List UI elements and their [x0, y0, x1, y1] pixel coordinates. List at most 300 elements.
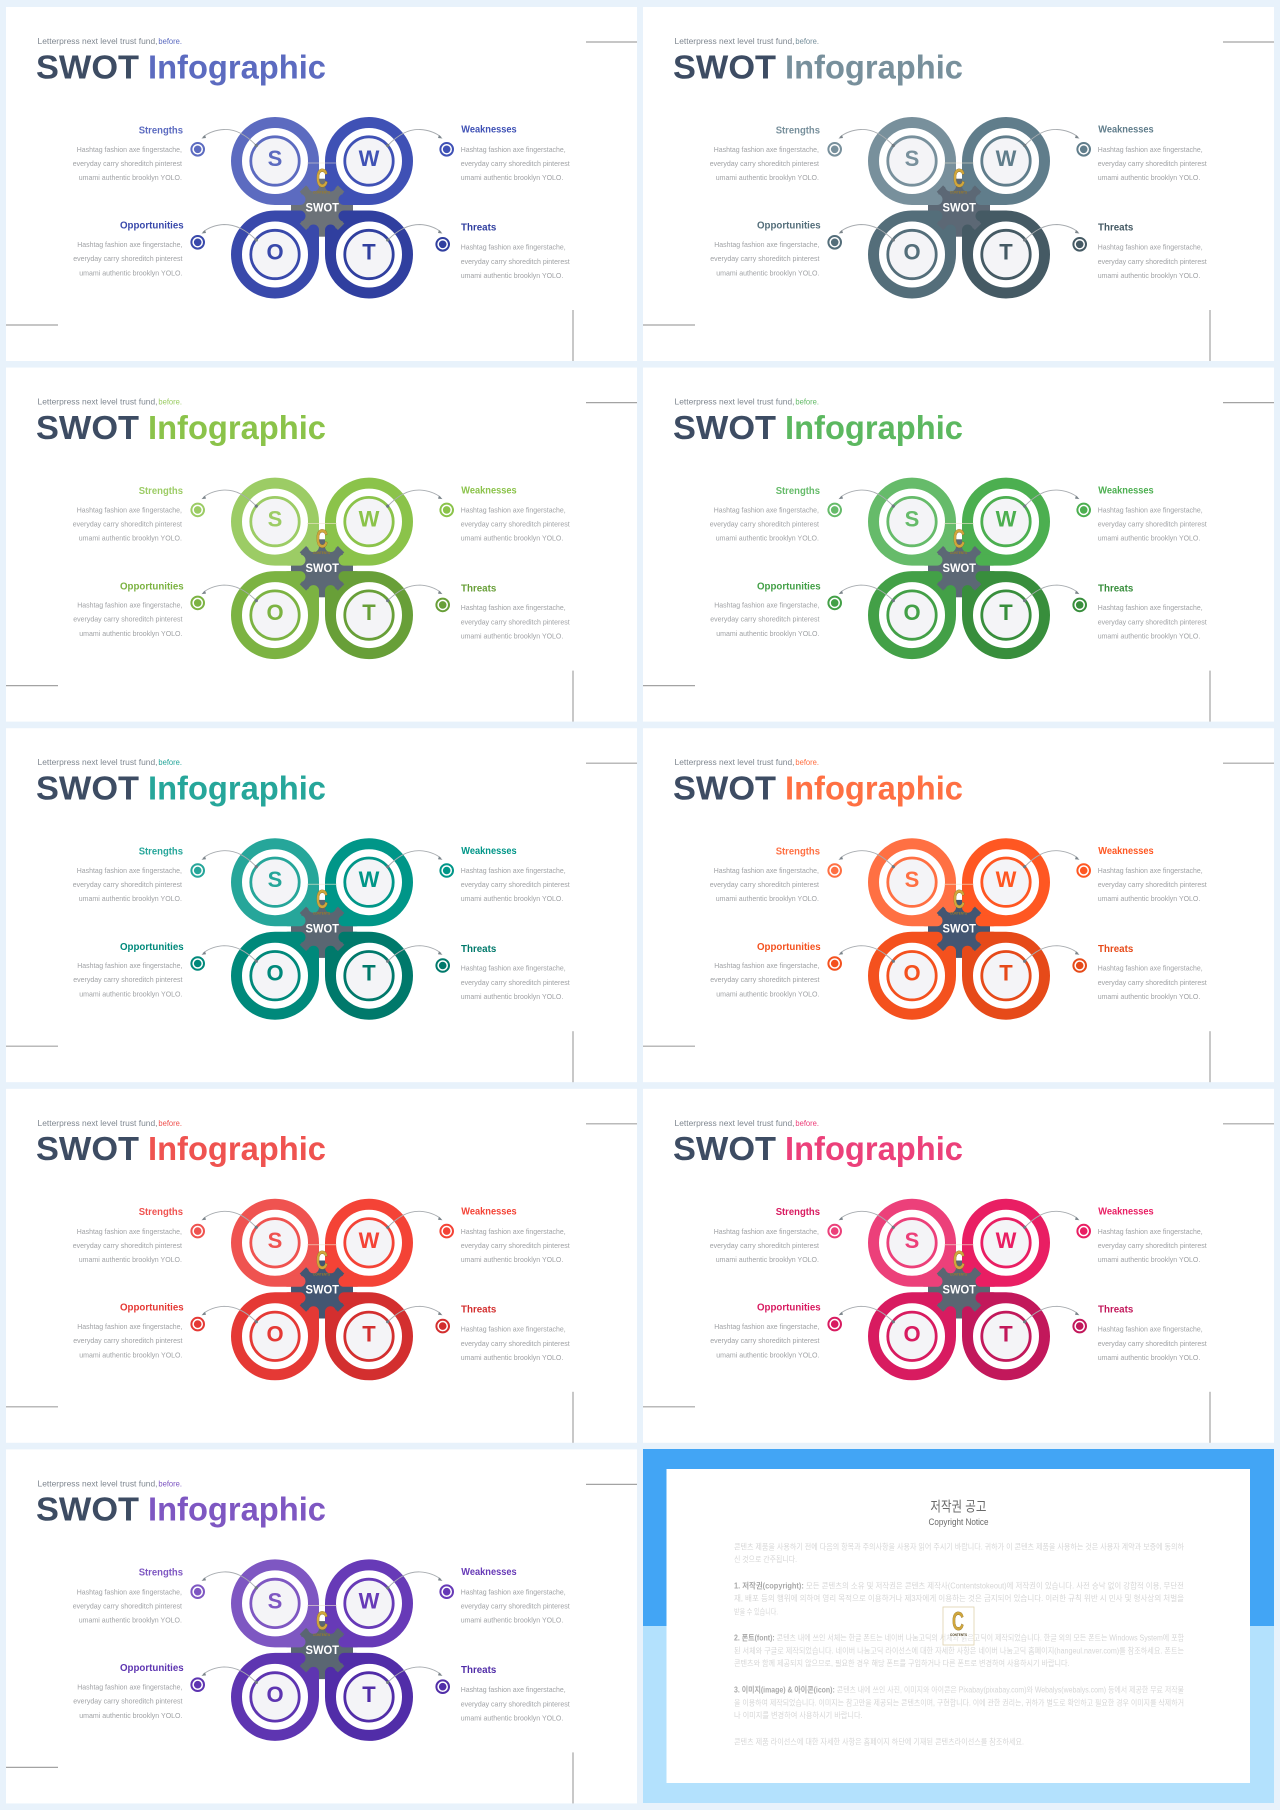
- quadrant: T: [968, 937, 1044, 1014]
- text block: strengths: Hashtag fashion axe fingerstache,: [714, 1227, 819, 1236]
- text block: strengths: umami authentic brooklyn YOLO.: [79, 1255, 182, 1264]
- text block: opportunities: umami authentic brooklyn YOLO.: [79, 990, 182, 999]
- text block: strengths: everyday carry shoreditch pinterest: [73, 1241, 182, 1250]
- text block: threats: Hashtag fashion axe fingerstache,: [1098, 964, 1203, 973]
- text block: threats: everyday carry shoreditch pinterest: [1098, 257, 1207, 266]
- quadrant: S: [237, 122, 314, 200]
- panel: purple SWOT slide: [6, 1449, 637, 1803]
- subtitle: Letterpress next level trust fund,: [674, 1118, 794, 1128]
- text block: weaknesses: [1098, 1206, 1207, 1264]
- watermark: C: [953, 1245, 965, 1275]
- text block: strengths: everyday carry shoreditch pinterest: [73, 159, 182, 168]
- text block: opportunities: Opportunities: [120, 942, 184, 953]
- text block: weaknesses: umami authentic brooklyn YOLO.: [1098, 1255, 1200, 1264]
- arrows: [838, 129, 1080, 242]
- text block: threats: everyday carry shoreditch pinterest: [461, 1339, 570, 1348]
- text block: threats: [1098, 583, 1207, 641]
- text block: opportunities: [73, 1663, 184, 1720]
- notice body text: [734, 1542, 1185, 1746]
- watermark: CONTENTS: [950, 550, 967, 555]
- text block: threats: Threats: [1098, 944, 1134, 955]
- text block: opportunities: [73, 581, 184, 638]
- text block: weaknesses: [1098, 846, 1207, 903]
- text block: strengths: Strengths: [776, 125, 820, 136]
- quadrant: S: S: [268, 1588, 282, 1613]
- text block: weaknesses: Hashtag fashion axe fingerstache,: [461, 866, 566, 875]
- quadrant: W: [330, 844, 408, 921]
- text block: strengths: Hashtag fashion axe fingerstache,: [77, 1227, 182, 1236]
- watermark: C: [316, 163, 328, 193]
- text block: threats: Threats: [461, 223, 497, 234]
- gear label: SWOT: [306, 1284, 339, 1296]
- quadrant: T: T: [362, 961, 376, 986]
- title: [36, 48, 326, 85]
- quadrant: T: T: [999, 961, 1013, 986]
- gear label: SWOT: [306, 1645, 339, 1657]
- text block: weaknesses: Hashtag fashion axe fingerstache,: [1098, 1227, 1203, 1236]
- panel: light green SWOT slide: [6, 368, 637, 722]
- quadrant: T: T: [362, 1682, 376, 1707]
- gear label: SWOT: [942, 924, 976, 936]
- text block: weaknesses: umami authentic brooklyn YOLO.: [461, 894, 563, 903]
- notice body text: 콘텐츠 제품 라이선스에 대한 자세한 사항은 홈페이지 하단에 기재된 콘텐츠라이선스를 참조하세요.: [734, 1736, 1024, 1746]
- text block: weaknesses: everyday carry shoreditch pinterest: [461, 1241, 570, 1250]
- panel: green SWOT slide: [643, 368, 1274, 722]
- text block: opportunities: Opportunities: [120, 1663, 184, 1674]
- quadrant: O: [237, 216, 314, 293]
- watermark: C: [953, 884, 965, 914]
- notice body text: 1. 저작권(copyright): 모든 콘텐츠의 소유 및 저작권은 콘텐츠 제작사(Contentstokeout)에 저작권이 있습니다. 사전 승낙 없이 강합적 이용, 무단전: [734, 1580, 1184, 1590]
- watermark: C: [316, 524, 328, 554]
- panel: orange SWOT slide: [643, 728, 1274, 1082]
- text block: threats: umami authentic brooklyn YOLO.: [461, 632, 563, 641]
- text block: opportunities: [710, 942, 821, 999]
- text block: strengths: everyday carry shoreditch pinterest: [710, 520, 819, 529]
- subtitle: before.: [158, 397, 182, 407]
- notice body text: 콘텐츠 제품을 사용하기 전에 다음의 항목과 주의사항을 사용자 읽어 주시기 바랍니다. 귀하가 이 콘텐츠 제품을 사용하는 것은 사용자 계약과 보증에 동의하: [734, 1542, 1185, 1552]
- text block: weaknesses: Hashtag fashion axe fingerstache,: [461, 1227, 566, 1236]
- quadrant: W: W: [996, 146, 1017, 171]
- text block: opportunities: everyday carry shoreditch pinterest: [710, 975, 820, 984]
- text block: threats: everyday carry shoreditch pinterest: [1098, 978, 1207, 987]
- subtitle: before.: [795, 1118, 819, 1128]
- subtitle: Letterpress next level trust fund,: [38, 36, 158, 46]
- target icons: [191, 864, 453, 972]
- watermark: CONTENTS: [313, 550, 330, 555]
- notice body text: 된 서체와 구글로 제작되었습니다. 네이버 나눔고딕 라이선스에 대한 자세한 사항은 네이버 나눔고딕 홈페이지(hangeul.naver.com)를 참조하세요. 폰트는: [734, 1646, 1184, 1656]
- text block: strengths: Strengths: [139, 847, 183, 858]
- text block: strengths: Strengths: [776, 486, 820, 497]
- text block: strengths: umami authentic brooklyn YOLO.: [716, 173, 819, 182]
- title: [673, 48, 963, 85]
- title: Infographic: [785, 1130, 963, 1167]
- notice body text: 콘텐츠와 함께 제공되지 않으므로, 필요한 경우 해당 폰트를 구입하거나 다른 폰트로 변경하여 사용하시기 바랍니다.: [734, 1658, 1070, 1668]
- watermark: C: [316, 884, 328, 914]
- text block: strengths: [73, 1207, 183, 1264]
- text block: strengths: umami authentic brooklyn YOLO.: [716, 534, 819, 543]
- watermark: CONTENTS: [313, 1271, 330, 1276]
- text block: opportunities: umami authentic brooklyn YOLO.: [716, 268, 820, 278]
- quadrant: T: T: [362, 600, 376, 625]
- text block: threats: Hashtag fashion axe fingerstache,: [461, 242, 566, 252]
- text block: opportunities: Hashtag fashion axe fingerstache,: [714, 961, 820, 970]
- text block: opportunities: Hashtag fashion axe fingerstache,: [714, 601, 820, 610]
- text block: strengths: Hashtag fashion axe fingerstache,: [77, 1587, 182, 1596]
- arrows: [202, 851, 442, 963]
- quadrant: T: T: [999, 240, 1013, 264]
- text block: opportunities: Opportunities: [757, 581, 821, 592]
- text block: weaknesses: [461, 1567, 570, 1624]
- title: Infographic: [148, 409, 326, 446]
- text block: opportunities: [710, 221, 821, 278]
- quadrant: S: S: [268, 867, 282, 892]
- text block: threats: Threats: [1098, 583, 1134, 594]
- title: Infographic: [148, 1491, 326, 1528]
- target icons: [191, 1585, 453, 1693]
- quadrant: T: [968, 577, 1044, 654]
- notice body text: 3. 이미지(image) & 아이콘(icon): 콘텐츠 내에 쓰인 사진, 이미지와 아이콘은 Pixabay(pixabay.com)와 Webalys(webalys.com) 등에서 제공한 무료 저작물: [734, 1684, 1184, 1694]
- watermark: [944, 884, 974, 916]
- title: SWOT: [36, 48, 139, 85]
- text block: weaknesses: umami authentic brooklyn YOLO.: [1098, 173, 1200, 182]
- quadrant: S: S: [268, 507, 282, 532]
- text block: opportunities: umami authentic brooklyn YOLO.: [79, 629, 182, 638]
- quadrant: S: S: [268, 1228, 282, 1253]
- text block: strengths: [710, 486, 820, 543]
- text block: opportunities: umami authentic brooklyn YOLO.: [79, 1711, 182, 1720]
- text block: weaknesses: everyday carry shoreditch pinterest: [1098, 880, 1207, 889]
- text block: opportunities: everyday carry shoreditch pinterest: [710, 1336, 820, 1345]
- text block: weaknesses: Weaknesses: [461, 1207, 517, 1218]
- arrows: [202, 129, 442, 242]
- text block: strengths: umami authentic brooklyn YOLO.: [79, 1615, 182, 1624]
- subtitle: Letterpress next level trust fund,: [38, 397, 158, 407]
- title: SWOT: [673, 48, 776, 85]
- text block: strengths: [73, 125, 183, 182]
- text block: strengths: umami authentic brooklyn YOLO.: [716, 894, 819, 903]
- text block: threats: Hashtag fashion axe fingerstache,: [1098, 242, 1203, 252]
- gear label: SWOT: [306, 924, 339, 936]
- text block: strengths: Strengths: [139, 125, 183, 136]
- target icons: [191, 143, 453, 251]
- panel: teal SWOT slide: [6, 728, 637, 1082]
- quadrant: O: O: [903, 1321, 921, 1346]
- notice body text: 재, 배포 등의 행위에 의하여 영리 목적으로 이용하거나 제3자에게 이용하는 것은 금지되어 있습니다. 이러한 규칙 위반 시 민사 및 형사상의 처벌을: [734, 1593, 1184, 1603]
- gear label: SWOT: [306, 563, 339, 575]
- text block: opportunities: umami authentic brooklyn YOLO.: [79, 1350, 182, 1359]
- text block: opportunities: everyday carry shoreditch pinterest: [710, 254, 820, 263]
- watermark: [307, 163, 337, 194]
- text block: threats: [461, 1665, 570, 1722]
- text block: threats: umami authentic brooklyn YOLO.: [461, 271, 563, 280]
- title: SWOT: [673, 409, 776, 446]
- watermark: [307, 1605, 337, 1637]
- text block: strengths: Hashtag fashion axe fingerstache,: [714, 866, 819, 875]
- text block: threats: everyday carry shoreditch pinterest: [461, 618, 570, 627]
- text block: threats: everyday carry shoreditch pinterest: [461, 1699, 570, 1708]
- quadrant: W: [968, 483, 1044, 560]
- subtitle: Letterpress next level trust fund,: [38, 757, 158, 767]
- text block: opportunities: Opportunities: [120, 1303, 184, 1314]
- text block: threats: umami authentic brooklyn YOLO.: [1098, 271, 1200, 280]
- gear label: SWOT: [942, 1284, 976, 1296]
- gear: [291, 1621, 353, 1679]
- quadrant: O: [874, 1298, 950, 1375]
- panel: copyright notice: [643, 1449, 1274, 1803]
- watermark: CONTENTS: [950, 911, 967, 916]
- text block: strengths: [710, 125, 820, 182]
- quadrant: O: [874, 937, 950, 1014]
- text block: strengths: everyday carry shoreditch pinterest: [710, 159, 819, 168]
- text block: weaknesses: [1098, 485, 1207, 543]
- text block: threats: umami authentic brooklyn YOLO.: [1098, 632, 1200, 641]
- text block: opportunities: everyday carry shoreditch pinterest: [710, 615, 820, 624]
- text block: opportunities: everyday carry shoreditch pinterest: [73, 1336, 182, 1345]
- text block: opportunities: umami authentic brooklyn YOLO.: [716, 1350, 820, 1359]
- title: Infographic: [785, 409, 963, 446]
- watermark: CONTENTS: [950, 190, 967, 194]
- text block: threats: umami authentic brooklyn YOLO.: [461, 1353, 563, 1362]
- title: [36, 409, 326, 446]
- watermark: CONTENTS: [950, 1632, 967, 1637]
- text block: strengths: umami authentic brooklyn YOLO.: [716, 1255, 819, 1264]
- quadrant: T: T: [999, 600, 1013, 625]
- title: SWOT: [673, 770, 776, 807]
- text block: opportunities: Opportunities: [757, 1303, 821, 1314]
- title: [36, 1130, 326, 1167]
- title: SWOT: [673, 1130, 776, 1167]
- quadrant: W: W: [359, 146, 380, 171]
- quadrant: W: [968, 1204, 1044, 1281]
- subtitle: Letterpress next level trust fund,: [38, 1478, 158, 1488]
- text block: weaknesses: Weaknesses: [1098, 1207, 1154, 1218]
- subtitle: before.: [158, 1118, 182, 1128]
- text block: threats: Hashtag fashion axe fingerstache,: [1098, 1324, 1203, 1333]
- text block: threats: [1098, 1304, 1207, 1362]
- quadrant: S: [874, 122, 950, 200]
- text block: weaknesses: Hashtag fashion axe fingerstache,: [461, 1587, 566, 1596]
- text block: weaknesses: Weaknesses: [1098, 846, 1154, 857]
- text block: opportunities: Hashtag fashion axe fingerstache,: [77, 961, 182, 970]
- quadrant: W: W: [359, 867, 380, 892]
- title: Infographic: [148, 770, 326, 807]
- watermark: C: [316, 1245, 328, 1275]
- text block: threats: Threats: [461, 1665, 497, 1676]
- text block: threats: everyday carry shoreditch pinterest: [1098, 1339, 1207, 1348]
- watermark: CONTENTS: [950, 1271, 967, 1276]
- band fingers over gear: [288, 1256, 356, 1324]
- text block: threats: Hashtag fashion axe fingerstache,: [461, 1685, 566, 1694]
- quadrant: O: O: [903, 240, 921, 264]
- band fingers over gear: [288, 535, 356, 603]
- text block: weaknesses: everyday carry shoreditch pinterest: [461, 880, 570, 889]
- text block: strengths: Strengths: [139, 1568, 183, 1579]
- quadrant: O: O: [903, 961, 921, 986]
- gear: [928, 539, 990, 597]
- text block: weaknesses: Weaknesses: [461, 485, 517, 496]
- text block: threats: everyday carry shoreditch pinterest: [1098, 618, 1207, 627]
- text block: opportunities: everyday carry shoreditch pinterest: [73, 1696, 182, 1705]
- subtitle: Letterpress next level trust fund,: [674, 397, 794, 407]
- text block: strengths: everyday carry shoreditch pinterest: [73, 880, 182, 889]
- text block: opportunities: Hashtag fashion axe fingerstache,: [77, 1322, 182, 1331]
- title: Infographic: [785, 770, 963, 807]
- band fingers over gear: [288, 1616, 356, 1684]
- quadrant: S: [237, 483, 314, 560]
- title: [673, 1130, 963, 1167]
- text block: opportunities: Opportunities: [120, 221, 184, 232]
- target icons: [191, 504, 453, 611]
- quadrant: T: [330, 216, 408, 293]
- text block: weaknesses: everyday carry shoreditch pinterest: [461, 159, 570, 168]
- quadrant: O: [237, 1298, 314, 1375]
- watermark: [944, 163, 974, 194]
- text block: weaknesses: [461, 125, 570, 182]
- text block: opportunities: [73, 1302, 184, 1359]
- gear: [928, 179, 990, 237]
- watermark: CONTENTS: [313, 1632, 330, 1637]
- text block: strengths: everyday carry shoreditch pinterest: [73, 1601, 182, 1610]
- text block: strengths: umami authentic brooklyn YOLO.: [79, 534, 182, 543]
- text block: weaknesses: umami authentic brooklyn YOLO.: [461, 534, 563, 543]
- text block: strengths: [73, 486, 183, 543]
- quadrant: O: O: [266, 961, 284, 986]
- text block: threats: everyday carry shoreditch pinterest: [461, 978, 570, 987]
- text block: opportunities: Opportunities: [120, 581, 184, 592]
- quadrant: T: [968, 1298, 1044, 1375]
- band fingers over gear: [288, 895, 356, 963]
- arrows: [838, 851, 1080, 963]
- target icons: [828, 864, 1090, 972]
- quadrant: O: O: [266, 600, 284, 625]
- text block: opportunities: [73, 221, 184, 278]
- title: SWOT: [36, 1130, 139, 1167]
- text block: opportunities: Hashtag fashion axe fingerstache,: [77, 240, 182, 249]
- quadrant: W: W: [359, 1228, 380, 1253]
- subtitle: before.: [795, 36, 819, 46]
- target icons: [828, 1225, 1090, 1332]
- quadrant: O: [237, 1658, 314, 1735]
- quadrant: W: [330, 1204, 408, 1281]
- notice title: 저작권 공고: [930, 1498, 986, 1514]
- watermark: C: [316, 1605, 328, 1635]
- target icons: [828, 143, 1090, 251]
- quadrant: O: [874, 577, 950, 654]
- subtitle: Letterpress next level trust fund,: [38, 1118, 158, 1128]
- quadrant: T: T: [362, 1321, 376, 1346]
- notice body text: 2. 폰트(font): 콘텐츠 내에 쓰인 서체는 한글 폰트는 네이버 나눔고딕의 서체와 맑은고딕이 제작되었습니다. 한글 외의 모든 폰트는 Windows System에 포함: [734, 1632, 1185, 1642]
- text block: weaknesses: umami authentic brooklyn YOLO.: [461, 173, 563, 182]
- notice body text: 나 이미지를 변경하여 사용하시기 바랍니다.: [734, 1710, 863, 1720]
- quadrant: S: S: [905, 867, 919, 892]
- notice subtitle: Copyright Notice: [928, 1517, 988, 1527]
- text block: threats: Hashtag fashion axe fingerstache,: [461, 964, 566, 973]
- watermark: [307, 884, 337, 916]
- text block: strengths: everyday carry shoreditch pinterest: [73, 520, 182, 529]
- quadrant: W: [330, 483, 408, 560]
- text block: threats: Threats: [461, 944, 497, 955]
- text block: weaknesses: [461, 485, 570, 543]
- text block: weaknesses: everyday carry shoreditch pinterest: [461, 520, 570, 529]
- text block: threats: [461, 1304, 570, 1362]
- text block: threats: Hashtag fashion axe fingerstache,: [461, 1324, 566, 1333]
- text block: threats: [1098, 944, 1207, 1001]
- text block: threats: [461, 223, 570, 280]
- quadrant: W: [968, 844, 1044, 921]
- gear label: SWOT: [942, 202, 976, 214]
- quadrant: O: [874, 216, 950, 293]
- quadrant: W: [968, 122, 1044, 200]
- text block: threats: umami authentic brooklyn YOLO.: [461, 1713, 563, 1722]
- text block: strengths: Hashtag fashion axe fingerstache,: [714, 506, 819, 515]
- subtitle: before.: [158, 1478, 182, 1488]
- arrows: [838, 1211, 1080, 1323]
- text block: strengths: everyday carry shoreditch pinterest: [710, 1241, 819, 1250]
- text block: strengths: Hashtag fashion axe fingerstache,: [77, 506, 182, 515]
- text block: strengths: [710, 846, 820, 903]
- text block: opportunities: Opportunities: [757, 221, 821, 232]
- text block: strengths: umami authentic brooklyn YOLO.: [79, 173, 182, 182]
- text block: strengths: Hashtag fashion axe fingerstache,: [714, 145, 819, 154]
- quadrant: S: [237, 1565, 314, 1642]
- title: Infographic: [785, 48, 963, 85]
- quadrant: T: T: [362, 240, 376, 264]
- panel: pink SWOT slide: [643, 1089, 1274, 1443]
- text block: opportunities: Hashtag fashion axe fingerstache,: [77, 1682, 182, 1691]
- text block: weaknesses: Hashtag fashion axe fingerstache,: [461, 506, 566, 515]
- text block: weaknesses: Weaknesses: [461, 1567, 517, 1578]
- target icons: [828, 504, 1090, 611]
- text block: opportunities: Hashtag fashion axe fingerstache,: [77, 601, 182, 610]
- watermark: C: [953, 524, 965, 554]
- quadrant: O: [237, 577, 314, 654]
- watermark: C: [953, 163, 965, 193]
- watermark: C: [952, 1606, 964, 1636]
- text block: opportunities: Hashtag fashion axe fingerstache,: [714, 1322, 820, 1331]
- title: [673, 770, 963, 806]
- text block: threats: umami authentic brooklyn YOLO.: [1098, 1353, 1200, 1362]
- watermark: CONTENTS: [313, 190, 330, 194]
- subtitle: Letterpress next level trust fund,: [674, 36, 794, 46]
- title: [36, 1491, 326, 1528]
- text block: threats: Threats: [1098, 223, 1134, 234]
- text block: threats: Threats: [461, 1305, 497, 1316]
- text block: weaknesses: Hashtag fashion axe fingerstache,: [1098, 145, 1203, 154]
- text block: weaknesses: [1098, 125, 1207, 182]
- text block: weaknesses: Hashtag fashion axe fingerstache,: [1098, 866, 1203, 875]
- watermark: [307, 1245, 337, 1276]
- subtitle: before.: [158, 36, 182, 46]
- quadrant: S: [874, 844, 950, 921]
- title: [673, 409, 963, 446]
- text block: strengths: umami authentic brooklyn YOLO.: [79, 894, 182, 903]
- text block: strengths: everyday carry shoreditch pinterest: [710, 880, 819, 889]
- text block: strengths: Strengths: [776, 847, 820, 858]
- text block: strengths: [73, 1568, 183, 1624]
- text block: opportunities: [73, 942, 184, 999]
- text block: weaknesses: everyday carry shoreditch pinterest: [461, 1601, 570, 1610]
- gear: [928, 900, 990, 958]
- title: SWOT: [36, 1491, 139, 1528]
- text block: weaknesses: Weaknesses: [461, 125, 517, 136]
- arrows: [202, 1211, 442, 1323]
- quadrant: S: [874, 1204, 950, 1281]
- text block: threats: Hashtag fashion axe fingerstache,: [461, 603, 566, 612]
- quadrant: T: [330, 577, 408, 654]
- text block: opportunities: umami authentic brooklyn YOLO.: [716, 990, 820, 999]
- band fingers over gear: [925, 174, 993, 242]
- quadrant: S: [874, 483, 950, 560]
